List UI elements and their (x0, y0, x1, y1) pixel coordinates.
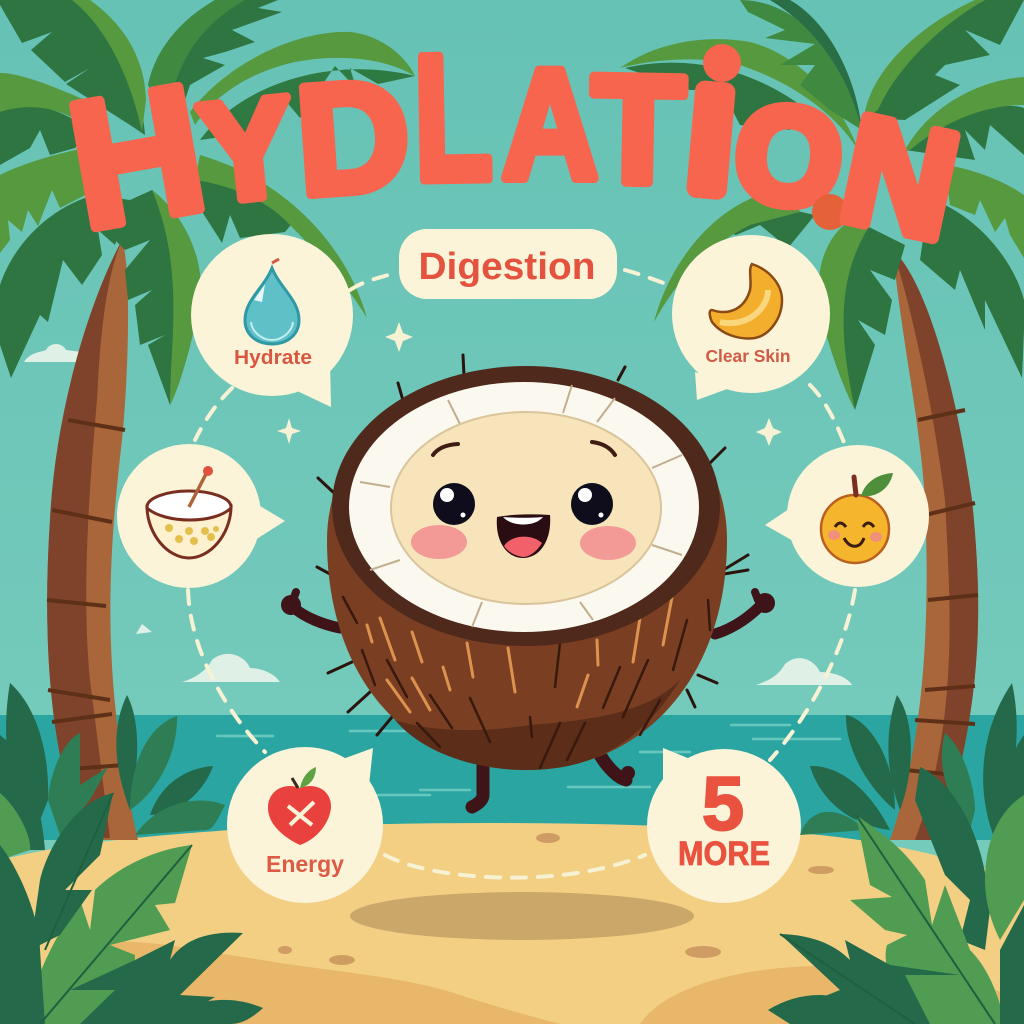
title: A (502, 38, 598, 212)
bubble: happy fruit (765, 445, 929, 587)
right palm trunk (890, 250, 978, 840)
clouds (24, 344, 852, 685)
sand pebbles (278, 833, 834, 965)
right palm tree (620, 0, 1024, 840)
bubble: 5 more (647, 748, 801, 903)
bubble: energy: Energy (266, 851, 344, 877)
left palm tree (0, 0, 415, 840)
bubble: 5 more: MORE (678, 835, 770, 873)
bubble: clear skin (672, 235, 830, 400)
title i dot (703, 44, 741, 82)
hair fibres (317, 355, 748, 735)
title: O (728, 75, 849, 237)
brows (433, 442, 615, 455)
title: N (829, 83, 971, 273)
sand darker patch (80, 942, 1024, 1024)
sea (0, 715, 1024, 840)
coconut character (281, 355, 775, 807)
bubble: clear skin: Clear Skin (706, 346, 790, 366)
title (56, 17, 971, 273)
digestion label (399, 229, 617, 299)
husk (327, 367, 727, 770)
title: I (684, 60, 738, 221)
white flesh (349, 382, 699, 632)
arms (293, 607, 340, 628)
husk orange strokes (367, 597, 672, 712)
bubble: hydrate: Hydrate (234, 347, 312, 369)
coconut ground shadow (350, 892, 694, 940)
bubble: coconut bowl (117, 444, 285, 588)
legs (472, 762, 483, 807)
icon: apple (268, 786, 331, 845)
digestion label: Digestion (418, 246, 596, 288)
bubble: hydrate (191, 234, 353, 407)
left palm fronds (0, 0, 415, 405)
bubble: 5 more: 5 (702, 762, 744, 847)
dashed ring connector (188, 270, 855, 878)
rim (332, 366, 720, 646)
title: H (56, 47, 219, 268)
title: D (291, 47, 415, 228)
sand (0, 823, 1024, 1024)
mouth (497, 514, 550, 558)
cheeks (411, 525, 467, 559)
bubble: energy (227, 747, 383, 903)
icon: coconut bowl (147, 491, 231, 523)
title: L (412, 17, 494, 218)
sparkles (277, 322, 782, 446)
eyes (433, 483, 475, 525)
title: T (590, 44, 686, 216)
sea ripples (217, 725, 840, 795)
icon: smiling orange (821, 495, 889, 563)
husk darker base (395, 680, 680, 770)
husk dark strokes (343, 597, 710, 768)
foreground leaves left (0, 683, 263, 1024)
cream inner (391, 412, 661, 604)
foreground leaves right (768, 683, 1024, 1024)
icon: water drop (245, 268, 299, 344)
right palm fronds (620, 0, 1024, 410)
flesh cracks (360, 385, 682, 627)
icon: banana crescent (710, 264, 782, 338)
left palm trunk (47, 240, 138, 840)
title: Y (192, 67, 302, 232)
